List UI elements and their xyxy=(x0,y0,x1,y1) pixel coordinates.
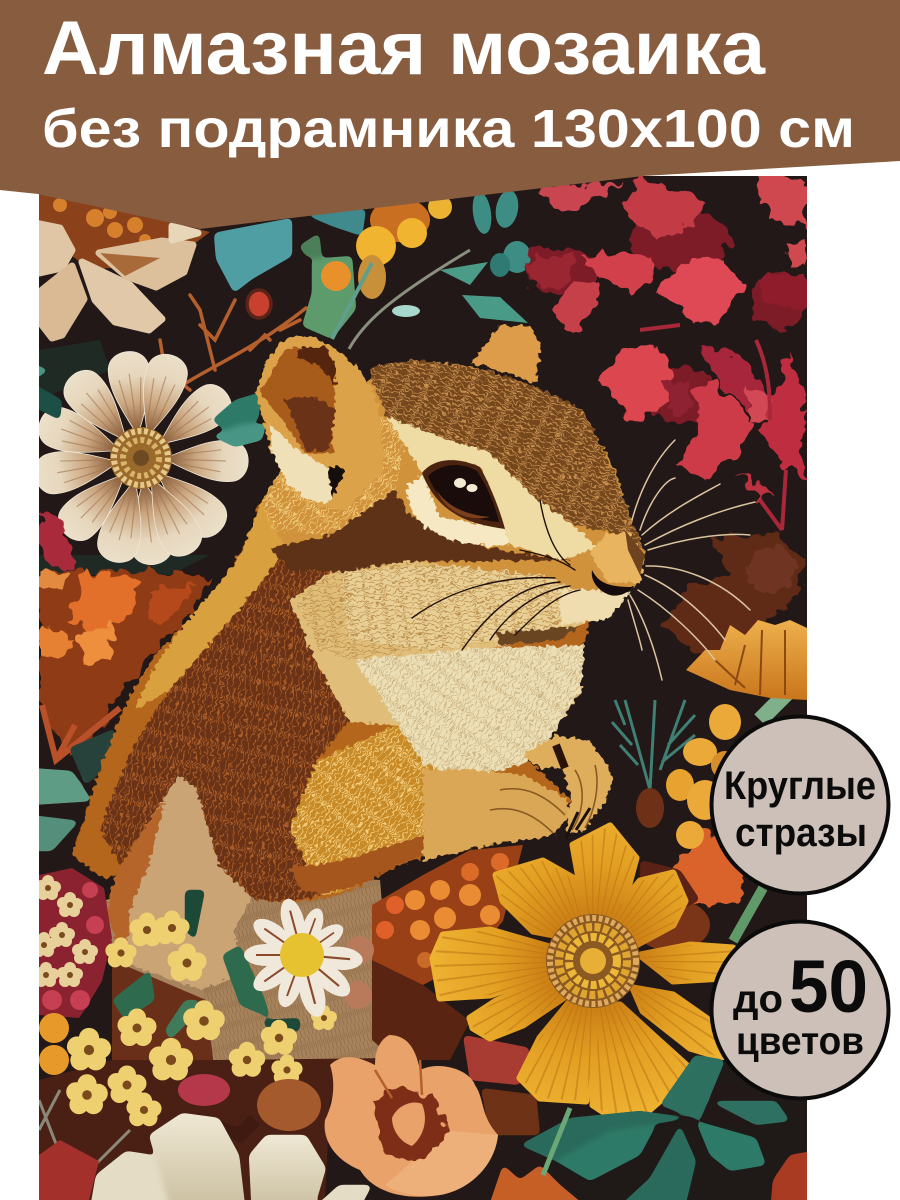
brown fill right of tan fur xyxy=(372,950,470,1060)
header banner xyxy=(0,0,900,229)
dark body hatching xyxy=(100,548,350,901)
large yellow flower xyxy=(433,826,733,1118)
lower jaw xyxy=(560,590,630,625)
badge: up to 50 colours: до xyxy=(733,977,783,1020)
eye xyxy=(422,460,505,529)
orange berries xyxy=(372,845,523,985)
belly lower shadow xyxy=(290,836,424,894)
painting: chipmunk among flowers xyxy=(30,176,820,1200)
chipmunk crisp details xyxy=(412,440,755,838)
red cluster left xyxy=(39,512,78,570)
red stems xyxy=(640,325,786,530)
orange daisy right xyxy=(686,620,807,700)
cream eyebrow stripe xyxy=(387,417,598,560)
brown and red behind big flower xyxy=(463,860,700,1135)
cream below eye xyxy=(407,473,510,546)
whiskers xyxy=(412,440,755,680)
top-left beige flower xyxy=(30,190,210,338)
cream flower bottom xyxy=(89,1113,372,1200)
crown hatching xyxy=(368,360,645,553)
muzzle streak xyxy=(625,530,645,575)
right-side elements xyxy=(612,620,807,951)
badge: round rhinestones xyxy=(712,716,888,894)
paw details xyxy=(490,745,597,833)
red and cream cluster left xyxy=(31,868,112,1075)
brown foliage right xyxy=(663,533,807,660)
brown star flowers xyxy=(344,936,374,1009)
gold hatch on head xyxy=(262,416,406,537)
badge: up to 50 colours: цветов xyxy=(736,1019,864,1062)
teal sprigs top centre xyxy=(392,188,531,323)
dark cheek stripe xyxy=(270,490,570,572)
paw xyxy=(523,735,613,835)
body base xyxy=(72,505,590,902)
nose xyxy=(592,570,632,596)
dark green shadows xyxy=(39,340,210,575)
bottom meadow xyxy=(39,1058,395,1200)
badge: round rhinestones: стразы xyxy=(735,811,867,855)
chest hatching xyxy=(355,645,585,775)
badge: up to 50 colours xyxy=(712,922,888,1098)
teal leaves lower left xyxy=(39,730,115,852)
flower centre xyxy=(546,914,640,1008)
small yellow flowers xyxy=(66,910,337,1126)
cheek hatching xyxy=(294,562,574,660)
petal streaks xyxy=(493,861,693,1061)
chest and cheek gold xyxy=(290,558,610,775)
title: Алмазная мозаика xyxy=(42,6,766,91)
tail orange edge xyxy=(106,802,166,941)
peach flower bottom xyxy=(325,1035,498,1197)
muzzle xyxy=(590,533,645,583)
orange flowers left xyxy=(39,570,212,755)
red flowers top right xyxy=(522,176,810,500)
green leaves in meadow xyxy=(112,890,300,1040)
badge: up to 50 colours: 50 xyxy=(789,945,868,1028)
red flower bottom left xyxy=(39,1140,99,1200)
orange twigs xyxy=(160,290,306,390)
right far ear xyxy=(471,326,541,383)
tail pale stripe xyxy=(106,772,252,990)
pink and tan clusters xyxy=(178,1074,321,1135)
head base xyxy=(262,365,645,600)
dark body fur xyxy=(100,548,350,901)
light cheek xyxy=(340,564,579,652)
golden belly hatching xyxy=(290,721,570,895)
mouth shadow xyxy=(496,626,580,645)
teal leaves bottom right xyxy=(486,1055,820,1200)
golden back band xyxy=(135,500,284,710)
chipmunk xyxy=(72,326,645,990)
lower tan fur xyxy=(106,871,382,1060)
claws xyxy=(566,808,590,838)
teal leaves by daisy xyxy=(30,363,266,447)
daisy left xyxy=(32,349,249,567)
arm xyxy=(423,768,570,861)
small white daisy xyxy=(244,896,364,1020)
cream chest xyxy=(355,645,585,775)
badge: round rhinestones: Круглые xyxy=(724,764,876,808)
brown crown stripe xyxy=(368,360,645,553)
subtitle: без подрамника 130х100 см xyxy=(42,99,855,159)
golden belly xyxy=(290,721,570,895)
yellow orange cluster top xyxy=(321,195,470,349)
teal and green foliage top xyxy=(214,209,366,339)
left ear xyxy=(256,336,385,510)
orange twig lower left xyxy=(42,705,120,760)
